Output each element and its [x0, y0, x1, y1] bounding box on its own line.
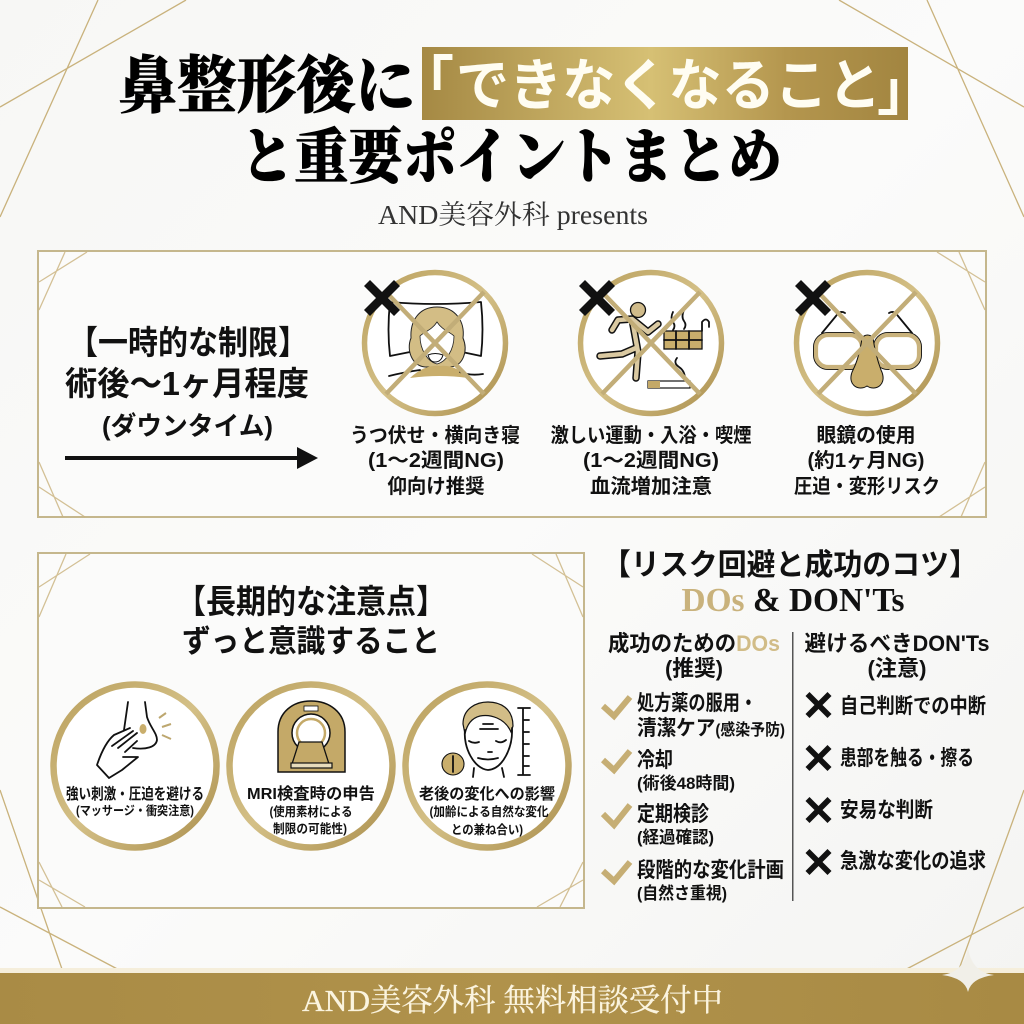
footer text: AND美容外科 無料相談受付中 [302, 983, 723, 1018]
title line 2: と重要ポイントまとめ [240, 110, 782, 196]
temporary heading: 術後〜1ヶ月程度 [65, 365, 309, 402]
column divider [792, 632, 794, 901]
temporary heading: 【一時的な制限】 [68, 324, 308, 361]
x mark 4 [806, 849, 832, 875]
title gold highlight: できなくなること [456, 41, 881, 122]
icon: no glasses [795, 272, 938, 414]
do item: gradual plan: (自然さ重視) [637, 883, 727, 903]
DOs column: (推奨) [665, 656, 723, 681]
panel: risk avoidance DOs and DON'Ts [602, 549, 990, 903]
temporary heading: (ダウンタイム) [102, 411, 273, 441]
do item: medication: 清潔ケア(感染予防) [637, 717, 785, 740]
dont item 4: 急激な変化の追求 [840, 850, 986, 873]
caption: sleep: うつ伏せ・横向き寝 [350, 423, 520, 447]
circle text: (加齢による自然な変化 [430, 804, 549, 819]
do item: checkup: (経過確認) [637, 828, 714, 847]
circle text: MRI検査時の申告 [247, 784, 375, 803]
caption: exercise [550, 424, 752, 498]
caption: glasses: (約1ヶ月NG) [808, 449, 924, 472]
do item: checkup: 定期検診 [637, 803, 709, 826]
do item: cooling [637, 749, 735, 793]
risk heading: DOs & DON'Ts [682, 582, 904, 619]
DON'Ts column: 避けるべきDON'Ts [804, 631, 990, 656]
check: medication [603, 697, 630, 716]
caption: glasses: 眼鏡の使用 [816, 424, 916, 447]
circle text [247, 784, 375, 836]
title gold highlight: 」 [877, 46, 933, 127]
sparkle [942, 947, 994, 992]
caption: exercise: (1〜2週間NG) [583, 449, 719, 472]
x mark 1 [806, 692, 832, 718]
circle text: 老後の変化への影響 [419, 784, 555, 803]
DOs column [603, 631, 785, 903]
long-term heading: ずっと意識すること [182, 624, 440, 659]
dont item 3: 安易な判断 [840, 799, 933, 822]
caption: glasses: 圧迫・変形リスク [794, 475, 940, 498]
dont item 1: 自己判断での中断 [840, 695, 986, 718]
dont item 2: 患部を触る・擦る [840, 747, 974, 770]
panel: long-term cautions [38, 553, 584, 908]
DOs column: 成功のためのDOs [608, 631, 780, 656]
icon circle: avoid pressure [54, 684, 216, 848]
subtitle: AND美容外科 presents [378, 200, 648, 230]
do item: cooling: (術後48時間) [637, 773, 735, 793]
do item: medication [637, 692, 785, 740]
temporary heading [65, 324, 309, 441]
check: gradual plan [603, 862, 630, 881]
check: checkup [603, 805, 630, 825]
circle text [419, 784, 555, 837]
caption: sleep: 仰向け推奨 [388, 475, 484, 498]
footer banner [0, 968, 1024, 1024]
icon: no face-down sleeping [364, 272, 506, 414]
DON'Ts column [804, 631, 990, 875]
caption: glasses [794, 424, 940, 498]
circle text [66, 785, 204, 818]
do item: gradual plan [637, 859, 784, 903]
icon circle: aging [406, 684, 568, 848]
icon circle: MRI [230, 684, 392, 848]
circle text: (マッサージ・衝突注意) [76, 803, 194, 818]
risk heading [602, 549, 978, 619]
circle text: 制限の可能性) [273, 821, 347, 836]
DON'Ts column: (注意) [868, 656, 926, 681]
title line 1 lead: 鼻整形後に [118, 36, 415, 125]
circle text: 強い刺激・圧迫を避ける [66, 785, 204, 803]
title gold highlight: 「 [398, 38, 454, 119]
check: cooling [603, 751, 630, 770]
long-term heading [176, 583, 446, 659]
caption: exercise: 血流増加注意 [590, 475, 712, 498]
caption: sleep: (1〜2週間NG) [368, 449, 504, 472]
do item: medication: 処方薬の服用・ [637, 692, 757, 715]
circle text: (使用素材による [270, 804, 352, 819]
x mark 3 [806, 797, 832, 823]
caption: sleep [350, 423, 520, 498]
title [118, 36, 933, 196]
do item: gradual plan: 段階的な変化計画 [637, 859, 784, 882]
icon: no exercise, bathing, smoking [579, 272, 722, 414]
long-term heading: 【長期的な注意点】 [176, 583, 446, 620]
caption: exercise: 激しい運動・入浴・喫煙 [550, 424, 752, 447]
do item: checkup [637, 803, 714, 847]
risk heading: 【リスク回避と成功のコツ】 [602, 549, 978, 582]
panel: temporary restrictions [38, 251, 986, 517]
do item: cooling: 冷却 [637, 749, 673, 772]
x mark 2 [806, 745, 832, 771]
circle text: との兼ね合い) [451, 822, 523, 837]
arrow [65, 447, 318, 469]
